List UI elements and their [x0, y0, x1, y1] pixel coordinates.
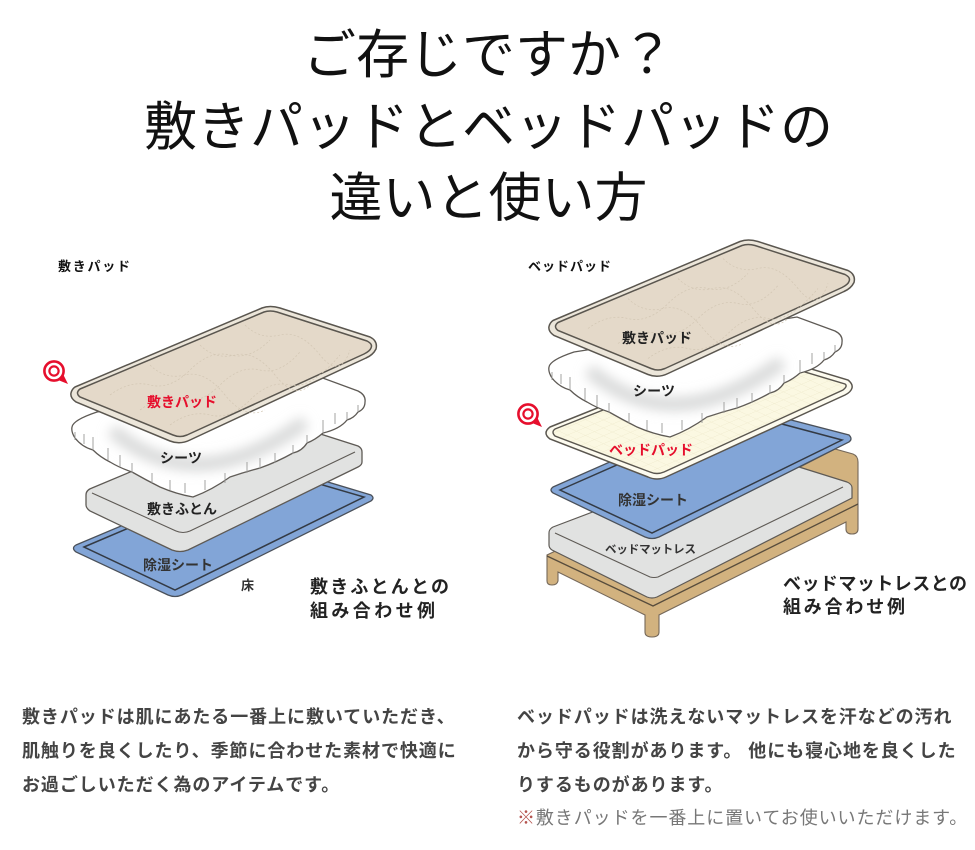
right moisture sheet	[551, 406, 851, 538]
icon: left target marker	[44, 361, 68, 384]
left diagram	[44, 306, 376, 596]
text block: right description	[517, 707, 957, 795]
label: bed pad: ベッドパッド	[609, 442, 693, 458]
note: ※敷きパッドを一番上に置いてお使いいただけます。	[517, 808, 968, 828]
title: 敷きパッドとベッドパッドの	[144, 98, 833, 156]
title: 違いと使い方	[330, 169, 648, 228]
caption: futon combination: 組み合わせ例	[310, 601, 435, 621]
label: left pad: 敷きパッド	[147, 394, 217, 410]
label: floor: 床	[241, 578, 254, 593]
bed frame	[547, 449, 858, 637]
left moisture sheet	[74, 464, 373, 596]
text block: left description: 肌触りを良くしたり、季節に合わせた素材で快適に	[22, 741, 457, 761]
label: left moisture sheet: 除湿シート	[143, 557, 213, 573]
text block: left description	[22, 707, 457, 795]
label: right pad: 敷きパッド	[622, 330, 692, 346]
right diagram	[518, 240, 858, 637]
left pad	[71, 306, 376, 443]
title: ご存じですか？	[303, 26, 674, 85]
text block: right description: から守る役割があります。 他にも寝心地を良くした	[517, 741, 957, 761]
label: left sheet: シーツ	[160, 450, 202, 466]
text block: right description: りするものがあります。	[517, 775, 723, 795]
right sheet	[549, 317, 842, 437]
caption: mattress combination: 組み合わせ例	[783, 597, 905, 617]
text block: left description: お過ごしいただく為のアイテムです。	[22, 775, 340, 795]
label: right moisture sheet: 除湿シート	[618, 492, 688, 508]
text block: right description: ベッドパッドは洗えないマットレスを汗などの汚れ	[517, 707, 952, 727]
icon: right target marker	[518, 404, 542, 427]
label: mattress: ベッドマットレス	[605, 544, 696, 556]
heading: 敷きパッド stack: 敷きパッド	[58, 259, 130, 274]
label: left futon: 敷きふとん	[147, 501, 217, 517]
label: right sheet: シーツ	[633, 383, 675, 399]
heading: ベッドパッド stack: ベッドパッド	[528, 259, 611, 274]
mattress	[549, 452, 852, 598]
caption: mattress combination: ベッドマットレスとの	[783, 574, 967, 594]
text block: left description: 敷きパッドは肌にあたる一番上に敷いていただき、	[22, 707, 456, 727]
caption: futon combination: 敷きふとんとの	[310, 576, 449, 597]
title	[144, 26, 833, 228]
left futon	[86, 416, 362, 552]
caption: futon combination	[310, 576, 449, 621]
caption: mattress combination	[783, 574, 967, 617]
right pad	[549, 240, 854, 376]
bed pad	[546, 349, 852, 479]
left sheet	[72, 377, 365, 497]
